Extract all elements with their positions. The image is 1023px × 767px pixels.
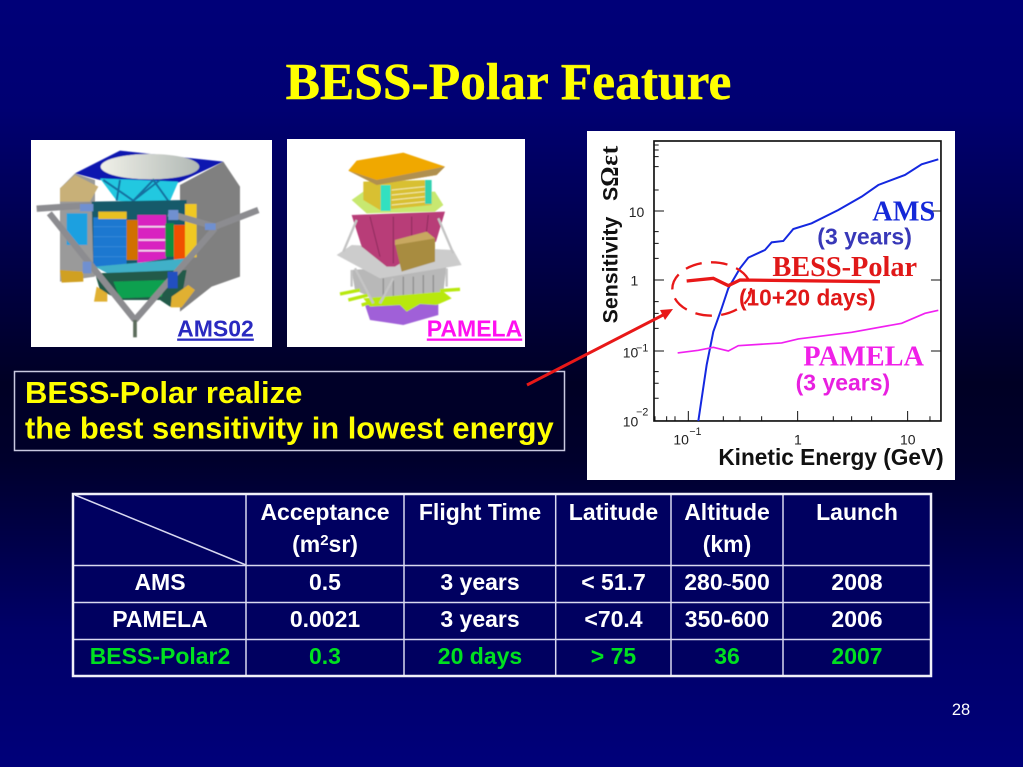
table: instrument comparison xyxy=(73,494,931,676)
callout: best sensitivity: the best sensitivity in lowest energy xyxy=(25,410,555,446)
row: BESS-Polar2: 36 xyxy=(714,643,740,669)
panel: PAMELA image xyxy=(287,139,525,347)
label: AMS02: AMS02 xyxy=(177,316,254,342)
x axis tick labels: 10 xyxy=(900,431,916,447)
line chart: sensitivity vs kinetic energy xyxy=(596,141,944,470)
row: PAMELA: 0.0021 xyxy=(290,606,360,632)
page number: 28 xyxy=(952,701,970,719)
label: PAMELA: PAMELA xyxy=(427,316,522,342)
row: PAMELA: 350-600 xyxy=(685,606,769,632)
header row: Acceptance xyxy=(260,499,390,525)
series label: BESS-Polar: BESS-Polar xyxy=(772,252,917,283)
row: PAMELA xyxy=(112,606,883,632)
row: BESS-Polar2 xyxy=(90,643,883,669)
row: PAMELA: 2006 xyxy=(831,606,883,632)
row: BESS-Polar2: 20 days xyxy=(438,643,522,669)
line chart: sensitivity vs kinetic energy: (3 years) xyxy=(817,223,912,249)
curve: BESS-Polar xyxy=(687,278,880,286)
series label: PAMELA: PAMELA xyxy=(803,342,924,373)
header row: 2 xyxy=(320,532,329,549)
x axis tick labels: 1 xyxy=(794,431,802,447)
curve: PAMELA xyxy=(678,310,938,353)
panel: AMS02 image xyxy=(31,140,272,347)
header row: Launch xyxy=(816,499,898,525)
icon: AMS02 detector illustration xyxy=(37,151,258,337)
x axis title: Kinetic Energy (GeV) xyxy=(718,444,944,470)
table grid xyxy=(73,494,931,676)
row: PAMELA: <70.4 xyxy=(584,606,643,632)
row: AMS: 280~500 xyxy=(684,569,770,595)
y axis tick labels: 10 xyxy=(629,204,645,220)
x axis tick labels: −1 xyxy=(689,426,702,438)
row: BESS-Polar2: 2007 xyxy=(831,643,883,669)
y axis tick labels: −2 xyxy=(636,407,648,419)
title: BESS-Polar Feature xyxy=(286,54,731,111)
row: AMS: < 51.7 xyxy=(581,569,646,595)
row: BESS-Polar2: > 75 xyxy=(591,643,636,669)
header row: Flight Time xyxy=(419,499,541,525)
line chart: sensitivity vs kinetic energy: (3 years) xyxy=(796,369,890,395)
line chart: sensitivity vs kinetic energy: (10+20 days) xyxy=(739,284,876,310)
y axis tick labels: 10 xyxy=(623,414,639,430)
header row: Latitude xyxy=(569,499,658,525)
y axis tick labels: −1 xyxy=(636,343,648,355)
row: AMS: AMS xyxy=(134,569,186,595)
row: BESS-Polar2: 0.3 xyxy=(309,643,341,669)
x axis tick labels: 10 xyxy=(673,431,689,447)
y axis tick labels: 10 xyxy=(623,345,639,361)
row: AMS: 3 years xyxy=(440,569,520,595)
row: PAMELA: PAMELA xyxy=(112,606,208,632)
icon: PAMELA instrument illustration xyxy=(337,153,462,325)
arrow: callout to ellipse xyxy=(527,309,673,385)
callout: best sensitivity xyxy=(14,372,564,450)
header row: sr) xyxy=(329,531,358,557)
plot frame xyxy=(654,141,941,421)
header row: (km) xyxy=(703,531,751,557)
y axis tick labels xyxy=(623,204,648,430)
row: AMS: 2008 xyxy=(831,569,883,595)
header row: (m xyxy=(292,531,320,557)
row: AMS xyxy=(134,569,883,595)
callout: best sensitivity: BESS-Polar realize xyxy=(25,375,302,410)
row: PAMELA: 3 years xyxy=(440,606,520,632)
series label: AMS: AMS xyxy=(872,196,935,227)
row: AMS: 0.5 xyxy=(309,569,341,595)
highlight ellipse xyxy=(672,262,751,316)
y axis tick labels: 1 xyxy=(631,273,639,289)
curve: AMS xyxy=(698,159,938,421)
panel: sensitivity chart xyxy=(587,131,955,480)
x axis tick labels xyxy=(673,426,916,447)
header row xyxy=(260,499,898,557)
y axis title: SensitivitySΩεt xyxy=(596,145,624,323)
row: BESS-Polar2: BESS-Polar2 xyxy=(90,643,230,669)
header row: Altitude xyxy=(684,499,770,525)
